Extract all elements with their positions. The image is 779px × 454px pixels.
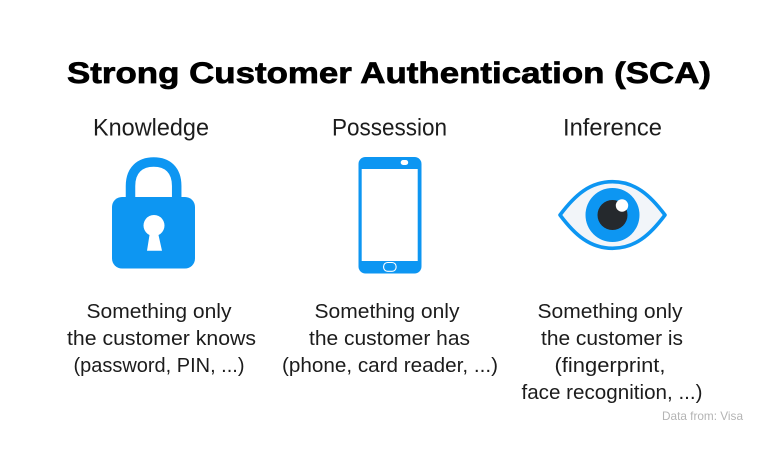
- heading: knowledge: Knowledge: [93, 114, 209, 142]
- description: possession: [282, 301, 498, 377]
- description: possession: (phone, card reader, ...): [282, 355, 498, 377]
- description: knowledge: the customer knows: [67, 328, 256, 350]
- panel: possession: [282, 114, 498, 377]
- description: inference: [522, 301, 702, 404]
- title: Strong Customer Authentication (SCA): [67, 57, 711, 90]
- description: knowledge: [67, 301, 256, 377]
- description: knowledge: (password, PIN, ...): [74, 355, 244, 377]
- heading: possession: Possession: [332, 114, 447, 142]
- description: inference: the customer is: [541, 328, 683, 350]
- description: inference: face recognition, ...): [522, 382, 702, 404]
- heading: inference: Inference: [563, 114, 662, 142]
- icon: smartphone: [358, 157, 422, 274]
- description: inference: Something only: [538, 301, 682, 323]
- description: possession: Something only: [314, 301, 460, 323]
- source note: Data from: Visa: [662, 409, 743, 423]
- icon: eye: [560, 182, 665, 248]
- icon: padlock: [112, 162, 195, 268]
- description: possession: the customer has: [309, 328, 470, 350]
- panel: inference: [522, 114, 702, 404]
- description: inference: (fingerprint,: [554, 355, 666, 377]
- panel: knowledge: [67, 114, 256, 377]
- description: knowledge: Something only: [86, 301, 232, 323]
